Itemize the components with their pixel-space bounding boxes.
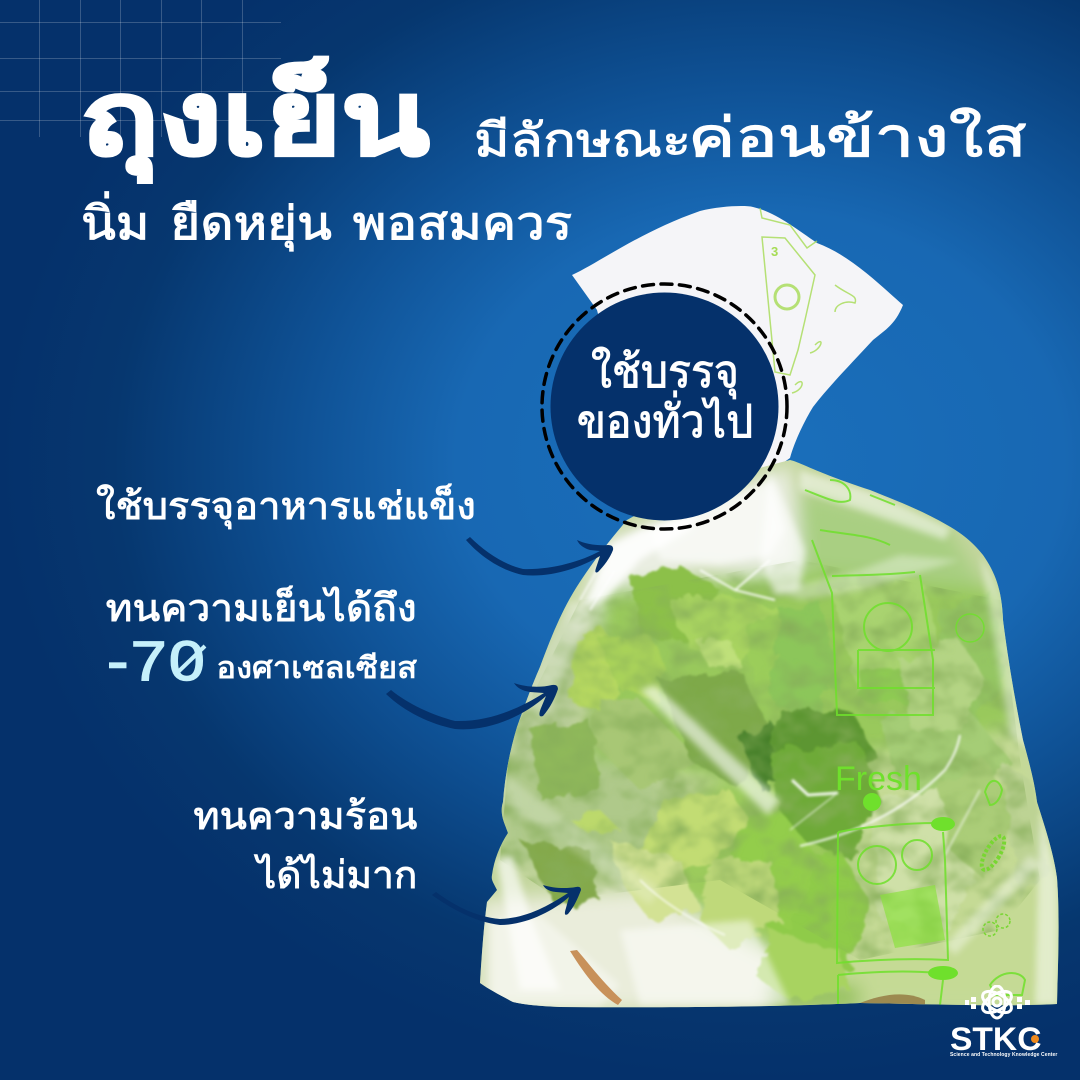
green printing xyxy=(805,480,1025,1005)
plastic highlights xyxy=(490,470,1058,1007)
circle callout: general packaging: ใช้บรรจุ xyxy=(591,346,739,397)
plastic fold lines xyxy=(580,560,980,935)
label: cold resistance: ทนความเย็นได้ถึง xyxy=(106,588,417,630)
text: Fresh printed on bag: Fresh xyxy=(835,760,922,798)
bag top flap: 3 xyxy=(771,244,778,259)
logo: STKC xyxy=(950,985,1058,1058)
bag top flap xyxy=(572,206,903,490)
heading line 2: นิ่ม ยืดหยุ่น พอสมควร xyxy=(81,197,572,249)
logo: STKC: STKC xyxy=(950,1021,1041,1057)
label: heat resistance line 2: ได้ไม่มาก xyxy=(257,855,417,897)
stem xyxy=(570,950,622,1005)
label: heat resistance line 1: ทนความร้อน xyxy=(193,796,417,838)
label: Celsius: องศาเซลเซียส xyxy=(216,652,417,685)
lettuce leaves xyxy=(520,565,1050,1000)
arrow 1 xyxy=(466,537,613,576)
label: minus 70: -70 xyxy=(107,629,207,692)
logo: STKC: Science and Technology Knowledge Center xyxy=(950,1052,1057,1058)
arrow 3 xyxy=(432,885,581,925)
darker mottling between leaves xyxy=(500,561,1039,960)
broad tonal zones xyxy=(480,465,1060,1010)
circle callout: general packaging: ของทั่วไป xyxy=(577,396,753,447)
arrow 2 xyxy=(386,683,558,729)
bag body with lettuce xyxy=(470,450,1070,1020)
heading: ค่อนข้างใส: ค่อนข้างใส xyxy=(688,108,1027,168)
label: frozen food: ใช้บรรจุอาหารแช่แข็ง xyxy=(96,486,476,528)
title: ถุงเย็น: ถุงเย็น xyxy=(81,61,429,176)
circle callout: general packaging xyxy=(540,282,789,531)
bag photo: lettuce in clear bag xyxy=(89,93,1059,1008)
heading: มีลักษณะ: มีลักษณะ xyxy=(474,114,691,166)
